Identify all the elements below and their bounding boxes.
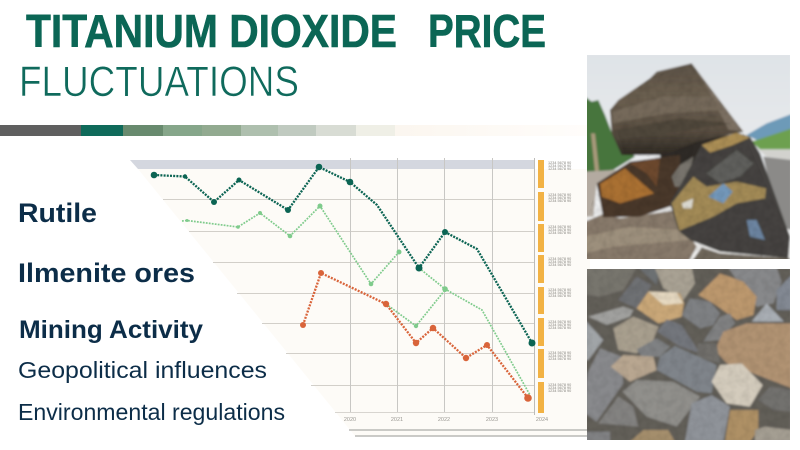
- x axis labels: 2024: [536, 417, 548, 423]
- legend small text: 1234 5678 90: [548, 386, 571, 390]
- grid: [163, 158, 534, 415]
- series: orange: [300, 270, 532, 402]
- colour band: [0, 125, 590, 136]
- title: [19, 5, 546, 106]
- line chart: [130, 158, 590, 436]
- legend small text: [548, 161, 571, 393]
- series: dark green: [151, 164, 535, 346]
- legend small text: 1234 5678 90: [548, 193, 571, 197]
- orange legend bars: [538, 160, 544, 413]
- legend small text: 1234 5678 90: [548, 354, 571, 358]
- chart base lines: [349, 429, 590, 431]
- legend small text: 1234 5678 90: [548, 320, 571, 324]
- x axis labels: 2020: [344, 417, 356, 423]
- legend small text: 1234 5678 90: [548, 164, 571, 168]
- legend small text: 1234 5678 90: [548, 225, 571, 229]
- photo: gravel pile: [585, 267, 792, 442]
- title: FLUCTUATIONS: [19, 58, 299, 106]
- factor: ilmenite ores: Ilmenite ores: [18, 258, 195, 288]
- title: PRICE: [428, 5, 546, 57]
- x axis labels: 2023: [486, 417, 498, 423]
- x axis labels: 2021: [391, 417, 403, 423]
- x axis labels: 2022: [438, 417, 450, 423]
- chart header band: [130, 160, 534, 169]
- factor list: [18, 198, 285, 425]
- legend small text: 1234 5678 90: [548, 323, 571, 327]
- legend small text: 1234 5678 90: [548, 389, 571, 393]
- legend small text: 1234 5678 90: [548, 351, 571, 355]
- rock texture: [587, 55, 790, 259]
- factor: environmental regulations: Environmental regulations: [18, 399, 285, 425]
- legend small text: 1234 5678 90: [548, 383, 571, 387]
- legend small text: 1234 5678 90: [548, 263, 571, 267]
- factor: rutile: Rutile: [18, 198, 97, 228]
- legend small text: 1234 5678 90: [548, 257, 571, 261]
- legend small text: 1234 5678 90: [548, 161, 571, 165]
- legend small text: 1234 5678 90: [548, 199, 571, 203]
- title: TITANIUM DIOXIDE: [26, 5, 397, 57]
- series: light green: [182, 204, 530, 395]
- legend small text: 1234 5678 90: [548, 357, 571, 361]
- legend small text: 1234 5678 90: [548, 326, 571, 330]
- legend small text: 1234 5678 90: [548, 291, 571, 295]
- shadow gap between rocks: [658, 133, 730, 166]
- legend small text: 1234 5678 90: [548, 288, 571, 292]
- x axis labels: [344, 417, 548, 423]
- legend small text: 1234 5678 90: [548, 196, 571, 200]
- legend small text: 1234 5678 90: [548, 294, 571, 298]
- legend small text: 1234 5678 90: [548, 167, 571, 171]
- factor: geopolitical influences: Geopolitical influences: [18, 357, 267, 383]
- gravel texture: [587, 269, 790, 440]
- chart background: [138, 169, 590, 436]
- photo: large ore rocks: [585, 53, 792, 262]
- legend small text: 1234 5678 90: [548, 231, 571, 235]
- legend small text: 1234 5678 90: [548, 228, 571, 232]
- factor: mining activity: Mining Activity: [19, 316, 203, 344]
- legend small text: 1234 5678 90: [548, 260, 571, 264]
